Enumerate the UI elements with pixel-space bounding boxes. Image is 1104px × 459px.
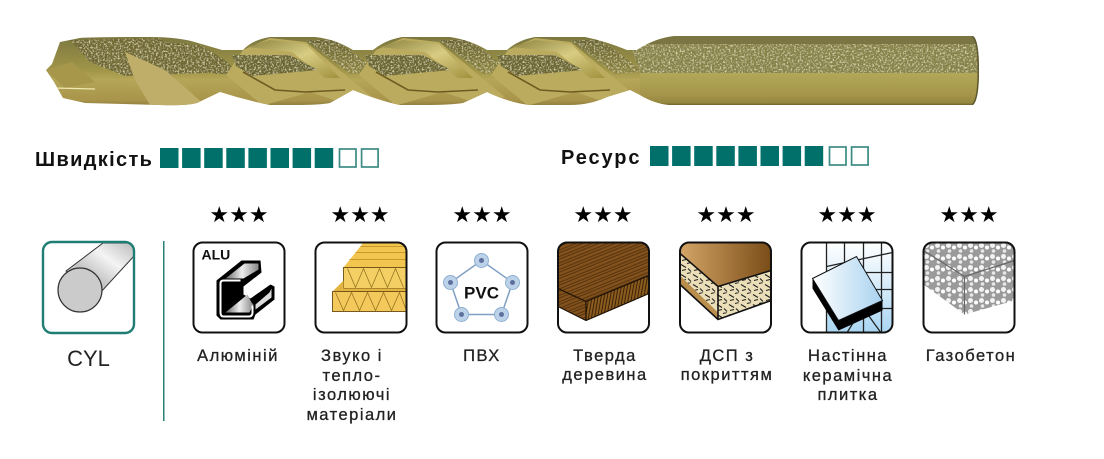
durability rating: Ресурс <box>561 147 641 169</box>
drill shank speckled band <box>630 44 979 73</box>
material: aerated concrete: ★★★ <box>939 203 999 228</box>
icon: PVC molecule <box>436 242 528 332</box>
shank type: CYL: CYL <box>67 346 110 371</box>
shank type: CYL <box>43 242 134 371</box>
material: aluminium: Алюміній <box>197 347 279 365</box>
material: aluminium <box>194 203 284 365</box>
label: плитка <box>817 386 879 404</box>
durability rating squares <box>650 146 868 166</box>
material: hardwood <box>558 203 649 384</box>
material: coated chipboard <box>680 203 773 384</box>
label: ДСП з <box>700 347 754 365</box>
speed rating: Швидкість <box>35 149 153 171</box>
label: Тверда <box>573 347 637 365</box>
divider <box>163 241 164 421</box>
icon: coated chipboard <box>680 242 771 332</box>
label: тепло- <box>323 367 381 385</box>
icon: PVC molecule: PVC <box>464 284 499 302</box>
durability rating <box>561 146 868 169</box>
label: Звуко і <box>321 347 383 365</box>
label: покриттям <box>681 366 773 384</box>
icon: aluminium profile: ALU <box>202 246 230 262</box>
material: aerated concrete: Газобетон <box>926 347 1016 365</box>
label: ізолюючі <box>313 386 391 404</box>
material: PVC: ★★★ <box>452 203 512 228</box>
material: aluminium: ★★★ <box>209 203 269 228</box>
drill bit photo illustration <box>46 36 979 106</box>
icon: aerated concrete block <box>924 242 1014 332</box>
label: деревина <box>562 366 648 384</box>
speed rating <box>35 148 378 171</box>
label: матеріали <box>306 406 398 424</box>
material: wall tile: ★★★ <box>817 203 877 228</box>
label: Настінна <box>808 347 888 365</box>
icon: ceramic wall tile <box>802 242 892 334</box>
infographic canvas <box>36 36 1016 424</box>
material: wall tile <box>802 203 893 404</box>
speed rating squares <box>160 148 378 168</box>
material: coated chipboard: ★★★ <box>696 203 756 228</box>
material: hardwood: ★★★ <box>573 203 633 228</box>
icon: insulation layers <box>316 242 406 332</box>
material: insulation: ★★★ <box>330 203 390 228</box>
material: aerated concrete <box>924 203 1016 365</box>
icon: hardwood board <box>558 242 649 332</box>
material: PVC <box>436 203 528 365</box>
icon: cylinder <box>43 242 134 333</box>
material: insulation <box>306 203 406 424</box>
material: PVC: ПВХ <box>463 347 501 365</box>
icon: aluminium profile <box>194 242 284 332</box>
label: керамічна <box>803 367 893 385</box>
